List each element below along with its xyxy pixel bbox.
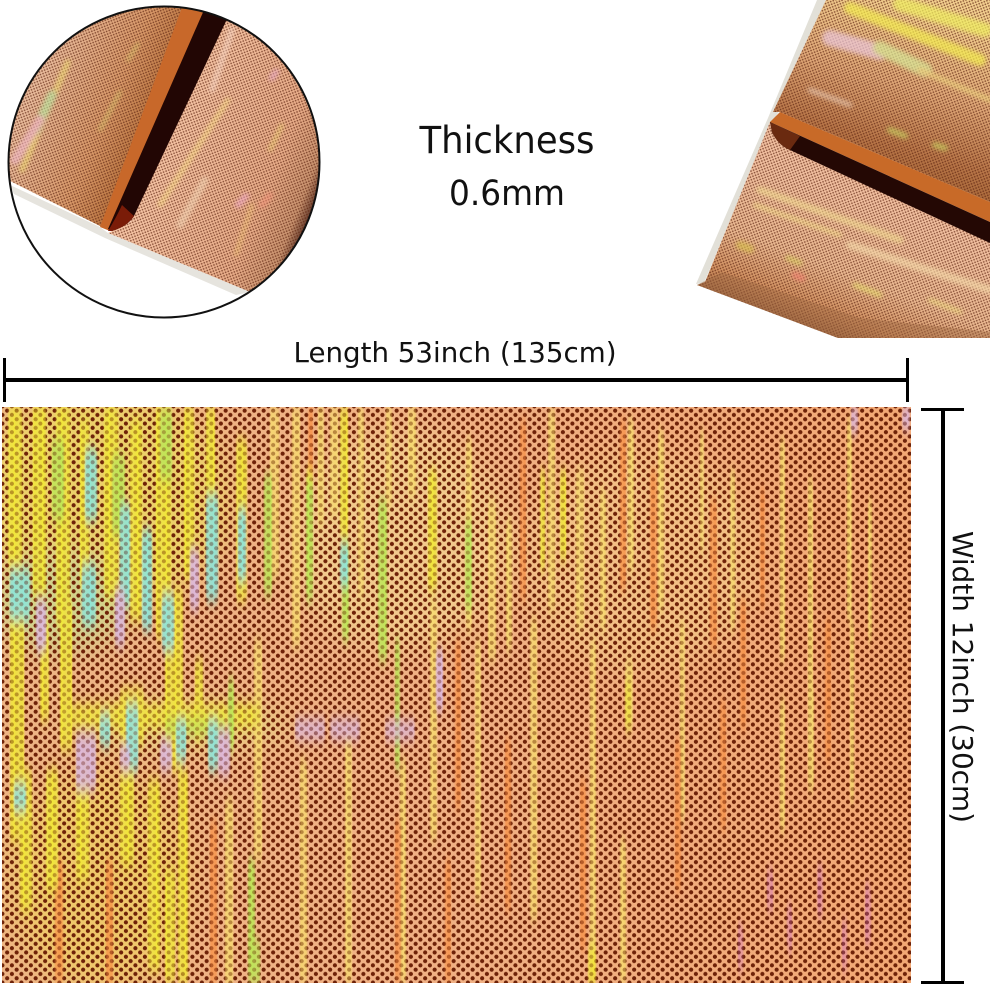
violet streaks [738, 865, 871, 970]
dot texture over streaks [2, 407, 911, 983]
soft colour glow [0, 390, 760, 987]
length dimension arrow [3, 358, 909, 402]
orange fold band [100, 5, 204, 231]
upper fold [773, 0, 990, 202]
width label: Width 12inch (30cm) [946, 531, 978, 823]
iridescent streaks [8, 407, 910, 987]
right foil fold [108, 20, 318, 292]
warm pale streaks [225, 407, 872, 987]
cyan streaks [10, 450, 348, 810]
rainbow streaks in circle [15, 30, 282, 255]
main holographic foil swatch [0, 390, 911, 987]
title: thickness label [419, 119, 594, 214]
lavender streaks [36, 407, 910, 790]
silver foil edge [10, 185, 250, 295]
left foil fold [10, 8, 182, 226]
orange fold band [770, 112, 990, 222]
silver left edge [696, 0, 826, 284]
dark bottom shade strip [697, 272, 990, 338]
horizontal rainbow streaks [740, 4, 990, 312]
circle outline [8, 6, 320, 318]
top right photo of folded foil [696, 0, 990, 338]
title: thickness label: 0.6mm [449, 174, 565, 214]
green streaks [52, 410, 472, 985]
width dimension arrow [921, 408, 964, 984]
orange streaks [55, 407, 831, 985]
length label: Length 53inch (135cm) [294, 337, 616, 369]
title: thickness label: Thickness [419, 119, 594, 162]
dark groove [108, 10, 228, 231]
lower fold [697, 122, 990, 338]
yellow streaks [8, 407, 631, 985]
dark groove [770, 122, 990, 243]
circular detail photo of foil [8, 6, 320, 318]
dot lattice [2, 407, 911, 983]
